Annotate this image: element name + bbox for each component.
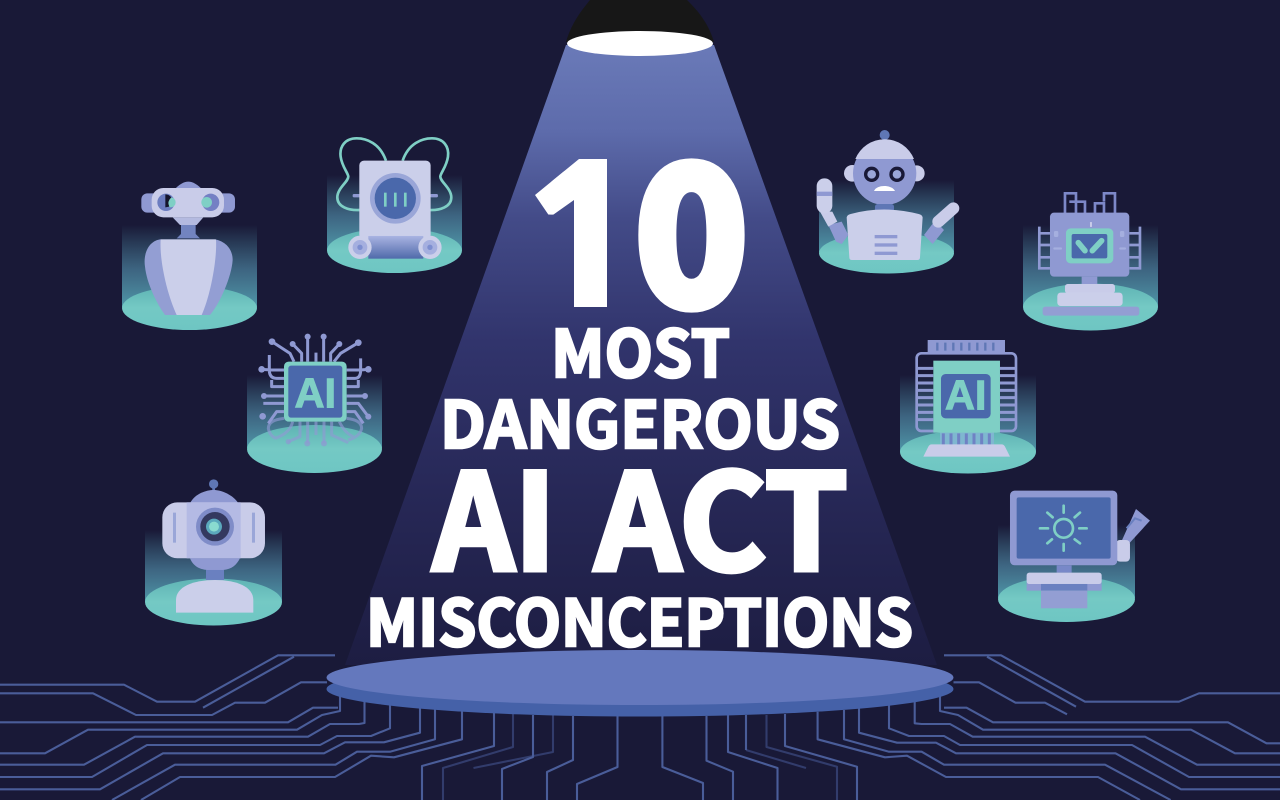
icon: worried robot waving bbox=[817, 130, 954, 274]
title: DANGEROUS bbox=[440, 373, 840, 467]
icon: teal-eared robot on rollers bbox=[327, 138, 462, 273]
spotlight lamp bbox=[566, 0, 714, 56]
title: 1 bbox=[530, 74, 648, 364]
icon: AI processor on stand: AI bbox=[945, 371, 986, 418]
title bbox=[370, 158, 912, 648]
icon: AI circuit chip bbox=[247, 334, 382, 473]
icon: AI processor on stand bbox=[900, 340, 1036, 474]
icon: binocular-eyed robot bbox=[122, 182, 257, 330]
stage platform bbox=[326, 650, 954, 716]
circuit traces: left bbox=[0, 655, 618, 800]
title: 0 bbox=[636, 84, 747, 359]
title: MISCONCEPTIONS bbox=[366, 573, 913, 665]
icon: AI circuit chip: AI bbox=[294, 369, 336, 416]
circuit traces: right bbox=[662, 655, 1280, 800]
icon: monitor machine with checkmark bbox=[1023, 193, 1158, 330]
icon: monitor with sun and brush bbox=[998, 491, 1150, 622]
title: MOST bbox=[551, 302, 730, 396]
title: AI bbox=[432, 417, 556, 609]
icon: camera-head robot bbox=[145, 479, 282, 626]
spotlight beam bbox=[345, 45, 937, 665]
title: ACT bbox=[594, 417, 848, 609]
